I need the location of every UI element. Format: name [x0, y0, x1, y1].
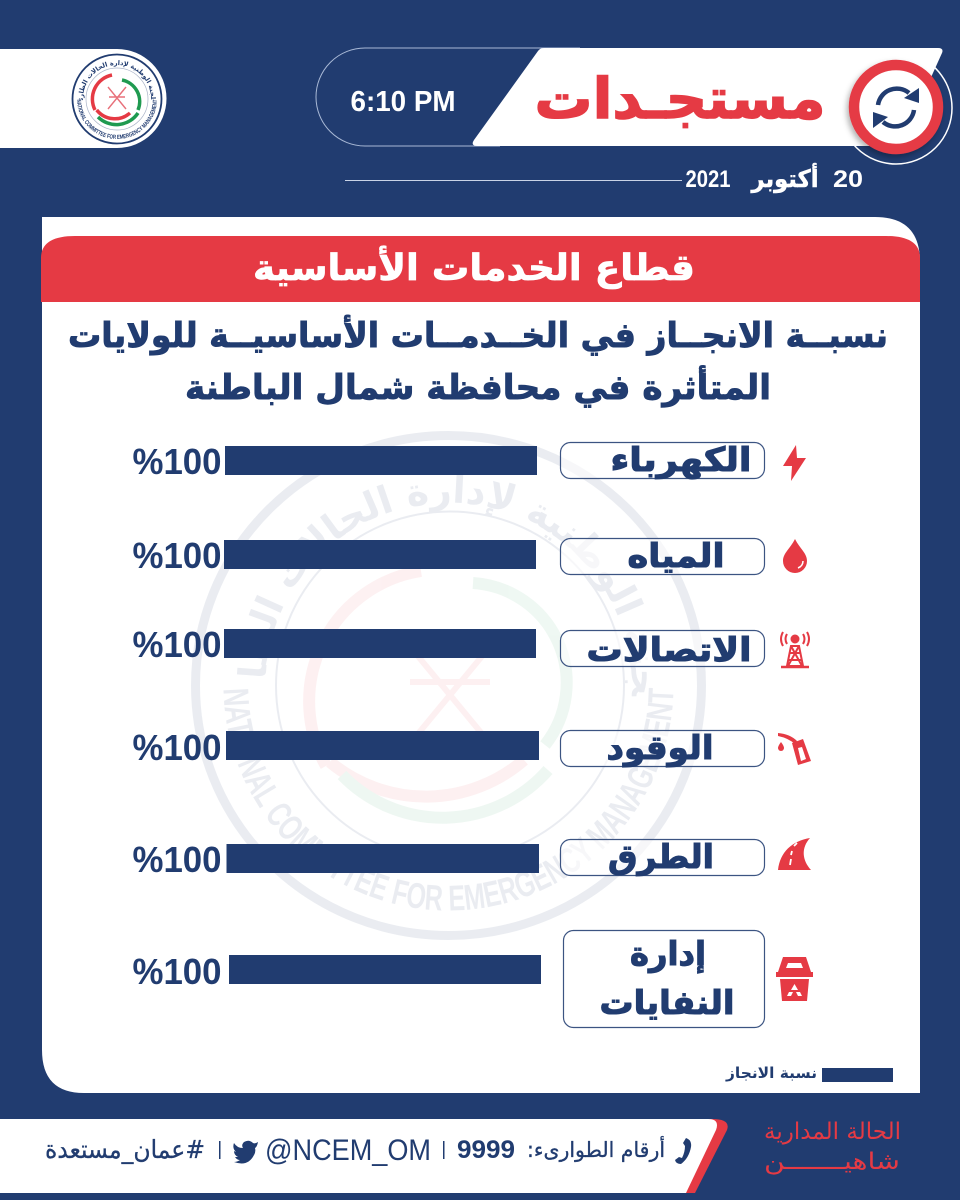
icon: road — [778, 838, 811, 870]
label: الطرق — [608, 837, 714, 877]
row: waste management — [132, 930, 813, 1028]
legend: نسبة الانجاز — [725, 1064, 817, 1082]
section band — [41, 236, 920, 302]
legend — [725, 1064, 893, 1082]
logo emblem — [72, 54, 162, 144]
date: أكتوبر — [751, 163, 818, 193]
row: roads — [132, 837, 811, 880]
value: %100 — [132, 839, 222, 880]
label — [560, 536, 764, 575]
label: الكهرباء — [610, 440, 752, 480]
banner shape — [473, 48, 942, 146]
hashtag: #عمان_مستعدة — [45, 1135, 205, 1164]
icon: phone — [675, 1138, 691, 1164]
white logo tab — [0, 49, 166, 148]
emergency label: أرقام الطوارىء: — [527, 1136, 665, 1162]
separator — [443, 1141, 444, 1159]
white bar — [0, 1119, 717, 1193]
subtitle: نسبــة الانجــاز في الخــدمــات الأساسيــة للولايات — [68, 314, 888, 356]
icon: fuel nozzle — [778, 733, 811, 765]
label: الاتصالات — [586, 630, 752, 669]
label — [560, 728, 764, 768]
row: fuel — [132, 727, 811, 768]
bar — [224, 540, 536, 569]
bar — [226, 731, 539, 760]
icon: recycling bin — [776, 957, 813, 1001]
row: telecom — [132, 624, 809, 669]
footer — [0, 1119, 728, 1193]
value: %100 — [132, 441, 222, 482]
title: مستجـدات — [534, 67, 826, 132]
weather status: الحالة المدارية — [764, 1119, 901, 1145]
icon: twitter bird — [233, 1141, 258, 1163]
logo panel — [0, 49, 166, 148]
icon: refresh in red ring — [854, 65, 938, 149]
row: water — [132, 535, 807, 576]
value: %100 — [132, 535, 222, 576]
icon: lightning bolt — [783, 445, 806, 481]
section band: قطاع الخدمات الأساسية — [253, 245, 695, 289]
label: المياه — [628, 536, 724, 575]
outer thin ring — [840, 52, 952, 164]
red edge — [680, 1119, 728, 1193]
bar — [225, 446, 537, 475]
label — [564, 930, 764, 1028]
label: النفايات — [600, 983, 734, 1022]
date — [345, 163, 863, 193]
value: %100 — [132, 727, 222, 768]
subtitle — [68, 314, 888, 408]
label — [560, 837, 764, 877]
time pill — [316, 48, 580, 146]
twitter handle: @NCEM_OM — [265, 1134, 431, 1167]
logo emblem: NATIONAL COMMITTEE FOR EMERGENCY MANAGEMENT — [77, 100, 157, 139]
icon: water drop — [783, 539, 807, 573]
date: 2021 — [686, 166, 730, 193]
separator — [219, 1141, 220, 1159]
row: electricity — [132, 440, 806, 482]
label: الوقود — [606, 728, 714, 768]
value: %100 — [132, 951, 222, 992]
weather status: شاهيـــــــن — [764, 1149, 900, 1175]
header banner — [473, 48, 952, 164]
bar — [224, 629, 536, 658]
time pill: 6:10 PM — [350, 86, 456, 118]
watermark — [191, 431, 706, 940]
bar — [229, 955, 541, 984]
watermark: NATIONAL COMMITTEE FOR EMERGENCY MANAGEMENT — [224, 688, 674, 910]
icon: telecom tower — [781, 632, 809, 667]
value: %100 — [132, 624, 222, 665]
label: إدارة — [630, 934, 706, 974]
weather status — [764, 1119, 901, 1175]
bar — [226, 844, 539, 873]
panel background — [42, 217, 920, 1093]
emergency number: 9999 — [457, 1136, 515, 1164]
label — [560, 440, 764, 480]
date: 20 — [833, 166, 863, 193]
subtitle: المتأثرة في محافظة شمال الباطنة — [185, 365, 771, 408]
